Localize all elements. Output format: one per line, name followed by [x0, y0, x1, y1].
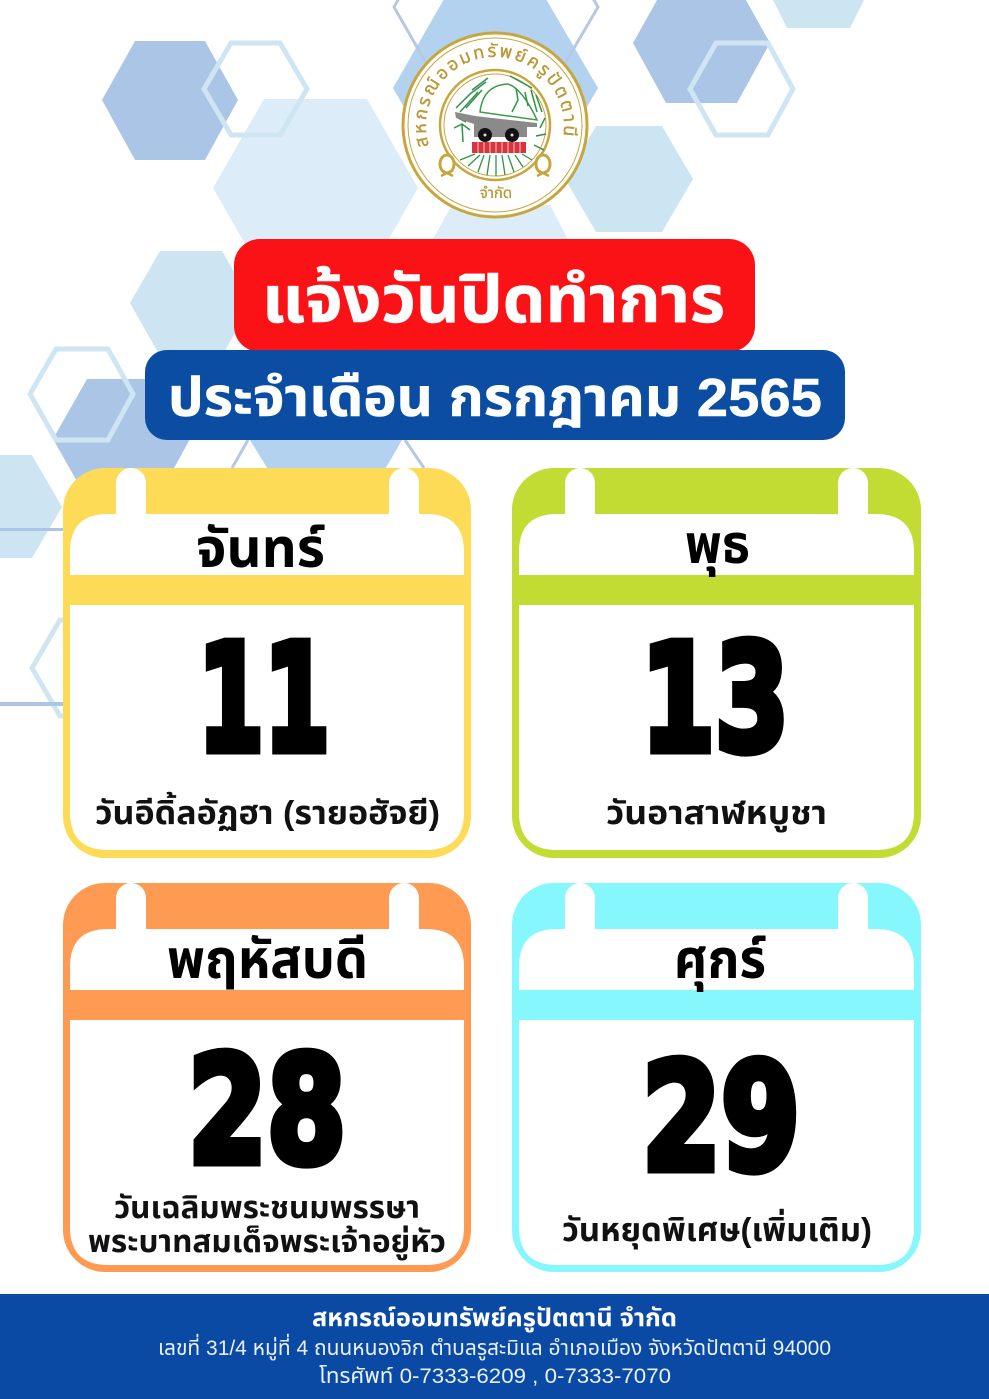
calendar card: Friday 29: 29	[642, 1032, 800, 1204]
calendar card: Thursday 28: พฤหัสบดี	[167, 930, 368, 990]
calendar card: Wednesday 13: วันอาสาฬหบูชา	[606, 794, 827, 833]
logo: cooperative seal: จำกัด	[480, 185, 512, 202]
calendar card: Thursday 28	[63, 883, 471, 1272]
calendar card: Wednesday 13: พุธ	[685, 515, 750, 577]
logo: cooperative seal	[402, 32, 588, 218]
calendar card: Wednesday 13: 13	[641, 613, 789, 785]
title banner	[234, 239, 755, 352]
subtitle banner: ประจำเดือน กรกฎาคม 2565	[168, 368, 822, 428]
calendar card: Monday 11: 11	[198, 613, 330, 785]
footer band with contact details	[0, 1294, 989, 1399]
calendar card: Monday 11	[63, 468, 471, 858]
calendar card: Friday 29: ศุกร์	[674, 930, 766, 992]
footer band with contact details: โทรศัพท์ 0-7333-6209 , 0-7333-7070	[319, 1365, 671, 1388]
footer band with contact details: สหกรณ์ออมทรัพย์ครูปัตตานี จำกัด	[312, 1304, 677, 1333]
calendar card: Friday 29	[512, 883, 921, 1272]
subtitle banner	[145, 350, 845, 440]
calendar card: Friday 29: วันหยุดพิเศษ(เพิ่มเติม)	[562, 1208, 872, 1250]
logo: cooperative seal: สหกรณ์ออมทรัพย์ครูปัตตานี	[416, 42, 578, 147]
calendar card: Thursday 28: พระบาทสมเด็จพระเจ้าอยู่หัว	[88, 1224, 446, 1260]
background hexagon pattern	[0, 0, 864, 716]
calendar card: Monday 11: จันทร์	[196, 519, 325, 579]
calendar card: Thursday 28: วันเฉลิมพระชนมพรรษา	[114, 1190, 420, 1225]
calendar card: Wednesday 13	[512, 468, 921, 858]
title banner: แจ้งวันปิดทำการ	[262, 262, 725, 336]
calendar card: Monday 11: วันอีดิ้ลอัฏฮา (รายอฮัจยี)	[95, 791, 440, 831]
footer band with contact details: เลขที่ 31/4 หมู่ที่ 4 ถนนหนองจิก ตำบลรูสะมิแล อำเภอเมือง จังหวัดปัตตานี 94000	[158, 1333, 831, 1361]
calendar card: Thursday 28: 28	[188, 1025, 346, 1197]
